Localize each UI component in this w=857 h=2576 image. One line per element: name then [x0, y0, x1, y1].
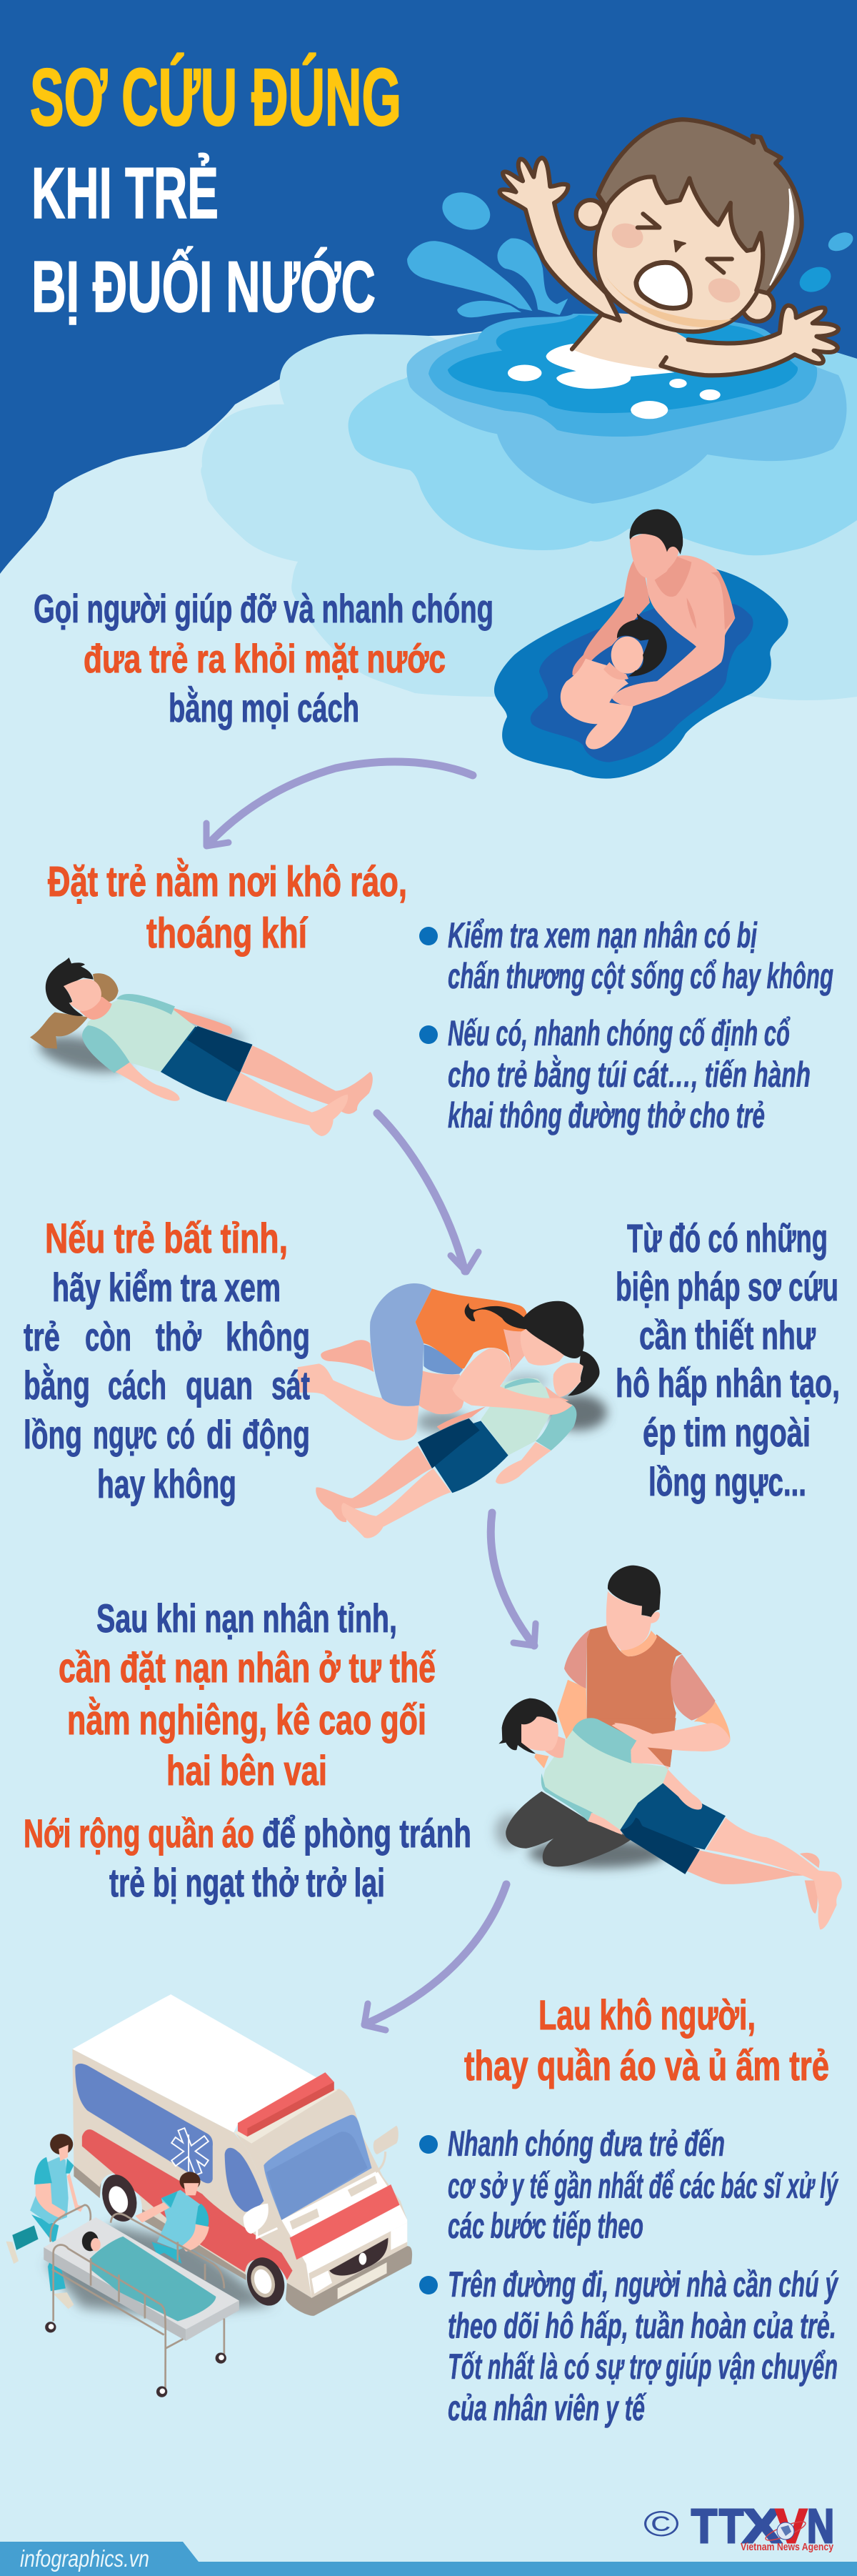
text: first step: Gọi người giúp đỡ và nhanh chóng: [34, 586, 493, 631]
man arms and shirt: [557, 1626, 730, 1767]
woman arm and head: [452, 1301, 584, 1415]
text: check breathing: di: [206, 1412, 232, 1457]
heading: step 2: [48, 858, 407, 957]
text: check breathing: bằng: [24, 1363, 90, 1408]
lying child body: [316, 1378, 576, 1538]
bullets: step 5: của nhân viên y tế: [448, 2388, 647, 2428]
text: after regaining consciousness: hai bên vai: [166, 1748, 327, 1794]
text: first step: bằng mọi cách: [169, 685, 359, 730]
man legs: [506, 1791, 631, 1866]
boy ears: [576, 200, 773, 322]
text: check breathing: sát: [271, 1363, 310, 1408]
nurse right: [135, 2172, 209, 2264]
ground shadow: [36, 1011, 249, 1078]
header background: [0, 0, 857, 574]
text: check breathing: trẻ: [24, 1314, 60, 1359]
heading: step 5: [464, 1992, 829, 2089]
logo: TTXVN: N: [807, 2500, 834, 2553]
text: check breathing: ngực: [93, 1412, 157, 1457]
logo: TTXVN: Vietnam News Agency: [741, 2542, 833, 2553]
footer band: infographics.vn: [20, 2545, 149, 2572]
text: after regaining consciousness: Nới rộng quần áo: [24, 1811, 254, 1856]
text: after regaining consciousness: Sau khi nạn nhân tỉnh,: [96, 1596, 397, 1641]
boy body and arms: [500, 158, 838, 377]
text: first aid measures: [616, 1215, 840, 1504]
shorts: [161, 1026, 252, 1102]
star of life: [176, 2132, 204, 2171]
title: KHI TRẺ: [31, 154, 219, 234]
text: check breathing: còn: [85, 1314, 131, 1359]
child arm: [612, 1724, 702, 1809]
bullets: step 5: các bước tiếp theo: [448, 2206, 643, 2246]
arrow: step 3 to 4: [491, 1513, 536, 1646]
logo: TTXVN: X: [743, 2500, 781, 2553]
logo: TTXVN: T: [691, 2500, 717, 2553]
child legs: [686, 1818, 842, 1929]
ground shadow: [495, 1814, 666, 1868]
water cloud layers: [201, 332, 857, 700]
lying child head: [545, 1351, 600, 1406]
stretcher: [44, 2205, 239, 2397]
orange shirt: [416, 1288, 527, 1374]
rescued child: [561, 613, 669, 750]
text: check breathing: có: [166, 1412, 195, 1457]
illustration: ambulance and stretcher: [6, 1994, 412, 2397]
logo: TTXVN: T: [719, 2500, 743, 2553]
side windows and stripe: [75, 2064, 292, 2280]
text: check breathing: hãy kiểm tra xem: [52, 1265, 281, 1310]
text: check breathing: động: [242, 1412, 310, 1457]
text: check breathing: không: [226, 1314, 310, 1359]
ambulance wheels: [96, 2170, 291, 2310]
title: SƠ CỨU ĐÚNG: [30, 52, 401, 142]
ground shadow: [46, 2225, 274, 2316]
text: check breathing: Nếu trẻ bất tỉnh,: [45, 1215, 288, 1262]
title: [30, 52, 401, 327]
text: after regaining consciousness: trẻ bị ngạt thở trở lại: [109, 1860, 385, 1905]
pillow: [30, 973, 119, 1049]
water pool: [406, 314, 847, 504]
kneeling woman legs: [298, 1283, 464, 1441]
head: [46, 958, 112, 1020]
boy head: [595, 119, 802, 332]
illustration: recovery position: [495, 1566, 842, 1929]
nurse left: [6, 2134, 84, 2309]
text: check breathing: thở: [156, 1314, 201, 1359]
man head: [606, 1566, 661, 1656]
text: after regaining consciousness: [24, 1596, 471, 1905]
logo: TTXVN: [643, 2500, 834, 2553]
illustration: man rescuing child from water: [494, 509, 788, 779]
footer band: [0, 2542, 857, 2576]
splash droplets: [407, 186, 856, 317]
text: first step: [34, 586, 493, 730]
heading: step 5: Lau khô người,: [538, 1992, 756, 2039]
text: first step: đưa trẻ ra khỏi mặt nước: [84, 636, 446, 681]
text: check breathing: quan: [186, 1363, 253, 1408]
illustration: drowning boy: [406, 119, 856, 504]
text: check breathing: cách: [108, 1363, 166, 1408]
mirrors: [244, 2126, 399, 2238]
illustration: child lying down: [30, 958, 373, 1136]
shirt and arms: [82, 994, 232, 1101]
logo: TTXVN: ©: [643, 2504, 679, 2544]
title: BỊ ĐUỐI NƯỚC: [31, 247, 376, 327]
ground shadow: [416, 1374, 607, 1433]
legs: [226, 1045, 373, 1136]
ambulance body: [72, 1994, 412, 2316]
man forearm: [614, 1723, 730, 1751]
rescue pool: [494, 570, 788, 779]
text: after regaining consciousness: cần đặt nạn nhân ở tư thế: [59, 1645, 436, 1691]
heading: step 2: Đặt trẻ nằm nơi khô ráo,: [48, 858, 407, 905]
bullets: step 5: [419, 2124, 838, 2428]
text: after regaining consciousness: để phòng tránh: [262, 1811, 471, 1856]
child head: [498, 1699, 566, 1769]
emergency light: [234, 2072, 338, 2144]
text: check breathing: lồng: [24, 1412, 82, 1457]
heading: step 2: thoáng khí: [146, 910, 308, 957]
child shirt: [541, 1718, 669, 1835]
bullets: step 2: [419, 915, 833, 1135]
foam and bubbles: [508, 344, 721, 419]
child shorts: [620, 1783, 726, 1874]
text: check breathing: [24, 1215, 310, 1506]
illustration: rescue breathing: [298, 1283, 607, 1538]
rescuer: [572, 509, 735, 706]
text: after regaining consciousness: nằm nghiêng, kê cao gối: [67, 1697, 426, 1744]
arrow: step 1 to 2: [206, 762, 473, 846]
arrow: step 2 to 3: [377, 1113, 478, 1272]
text: check breathing: hay không: [97, 1461, 236, 1506]
logo: TTXVN: V: [776, 2500, 807, 2553]
arrow: step 4 to 5: [364, 1884, 506, 2030]
